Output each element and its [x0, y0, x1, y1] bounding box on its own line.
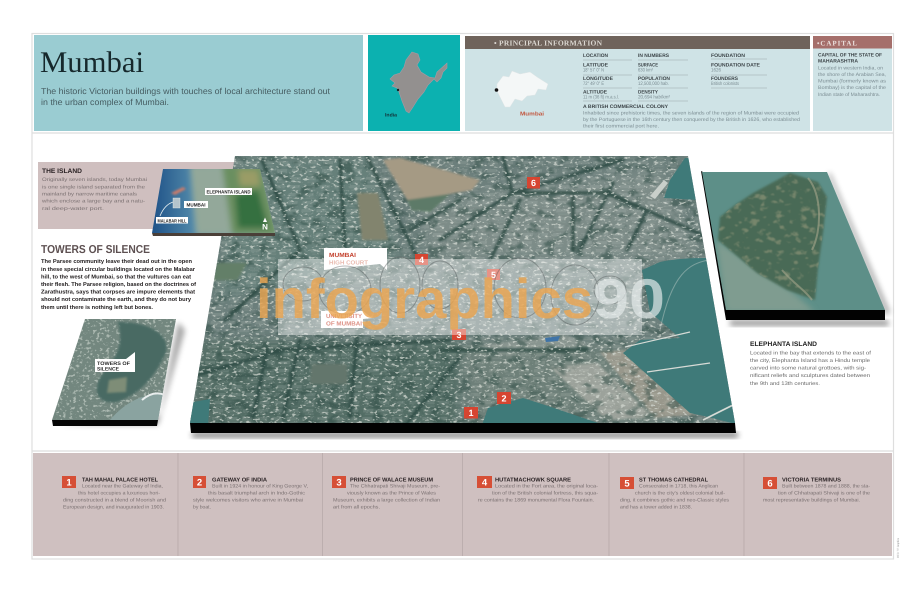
- column: foundation: British colonists: [711, 81, 739, 87]
- column: in numbers: DENSITY: [638, 90, 659, 96]
- marker 5: [487, 269, 500, 280]
- column: foundation: FOUNDATION: [711, 53, 745, 59]
- text block: a British commercial colony: Inhabited since prehistoric times, the seven islands of the region of Mumbai were occupied: [583, 110, 799, 116]
- map: the island inset: [150, 165, 278, 236]
- text block: Elephanta Island: the city, Elephanta Island has a Hindu temple: [750, 358, 870, 364]
- landmark 3: PRINCE OF WALACE MUSEUM: [350, 478, 433, 484]
- heading: towers of silence: TOWERS OF SILENCE: [41, 244, 150, 256]
- landmark 4: 4: [482, 478, 488, 488]
- text block: capital description: [818, 52, 887, 98]
- text block: a British commercial colony: [583, 104, 800, 130]
- landmark 2: by boat.: [193, 504, 211, 510]
- map: Maharashtra: [495, 71, 548, 118]
- column: location: ALTITUDE: [583, 90, 608, 96]
- callout: towers of silence: TOWERS OF: [97, 361, 130, 367]
- map: towers of silence block: [45, 315, 185, 426]
- callout: University of Mumbai: UNIVERSITY: [326, 313, 362, 320]
- landmark 3: [332, 476, 440, 510]
- landmark 1: [62, 476, 166, 510]
- column: location: 18° 57' 0" N: [583, 68, 604, 74]
- landmark 3: Museum, exhibits a large collection of Indian: [333, 498, 440, 504]
- landmark 1: this hotel occupies a luxurious hori-: [78, 490, 160, 496]
- text block: capital description: Indian state of Maharashtra.: [818, 92, 880, 98]
- text block: Elephanta Island: carved into some natural grottoes, with sig-: [750, 366, 866, 372]
- landmark 4: Located in the Fort area, the original loca-: [495, 484, 598, 490]
- landmark 4: tion of the British colonial fortress, this squa-: [492, 490, 598, 496]
- label: Elephanta Island: ELEPHANTA ISLAND: [206, 190, 251, 196]
- column rules: [583, 59, 767, 101]
- text block: Originally seven islands, today Mumbai: [42, 177, 147, 183]
- landmark 6: 6: [767, 478, 773, 490]
- text block: ral deep-water port.: [42, 206, 104, 212]
- watermark: infographics: [256, 267, 593, 330]
- landmark 3: art from all epochs.: [333, 504, 380, 510]
- column: in numbers: IN NUMBERS: [638, 53, 670, 59]
- landmark 1: European design, and inaugurated in 1903.: [63, 504, 164, 510]
- landmark 4: re contains the 1869 monumental Flora Fountain.: [478, 498, 594, 504]
- panel: principal information: [465, 36, 810, 131]
- callout: Mumbai High Court: HIGH COURT: [329, 260, 368, 266]
- watermark: [256, 257, 665, 335]
- text block: towers of silence: hill, to the west of Mumbai, so that the vultures can eat: [41, 274, 191, 280]
- callout: University of Mumbai: OF MUMBAI: [326, 320, 362, 328]
- column: location: LONGITUDE: [583, 76, 614, 82]
- text block: capital description: Mumbai (formerly known as: [818, 78, 887, 84]
- text block: Elephanta Island: Located in the bay that extends to the east of: [750, 350, 872, 356]
- landmark 2: Built in 1924 in honour of King George V,: [212, 484, 308, 490]
- column: in numbers: 12,500,000 hab.: [638, 81, 669, 87]
- landmark 6: VICTORIA TERMINUS: [782, 478, 841, 484]
- text block: capital description: MAHARASHTRA: [818, 58, 858, 64]
- landmark 5: ding, it combines gothic and neo-Classic styles: [620, 498, 730, 504]
- map: Elephanta Island block: [700, 170, 890, 326]
- heading: THE ISLAND: [42, 168, 82, 175]
- callout: University of Mumbai: [321, 311, 372, 328]
- title: Mumbai: [40, 46, 144, 79]
- marker 2: 2: [501, 394, 507, 404]
- sports fields and parks: [213, 158, 480, 384]
- subtitle: The historic Victorian buildings with touches of local architecture stand out: [41, 86, 331, 96]
- text block: towers of silence: them until there is nothing left but bones.: [41, 304, 153, 311]
- marker 5: 5: [491, 270, 496, 280]
- landmark 1: ding constructed in a blend of Moorish and: [63, 498, 166, 504]
- landmark 2: [193, 476, 308, 510]
- landmark 3: viously known as the Prince of Wales: [347, 490, 437, 496]
- text block: a British commercial colony: by the Portuguese in the 16th century then conquered by the British in 1626, who established: [583, 117, 800, 123]
- map: central Mumbai aerial block: [185, 150, 745, 438]
- column: location: 11 m (36 ft) m.a.s.l.: [583, 94, 619, 100]
- text block: mainland by narrow maritime canals: [42, 192, 138, 198]
- column: in numbers: 20,694 hab/km²: [638, 94, 670, 100]
- landmark 1: 1: [66, 478, 72, 488]
- landmark 5: 5: [624, 478, 630, 490]
- text block: a British commercial colony: A BRITISH COMMERCIAL COLONY: [583, 104, 669, 110]
- text block: towers of silence: Zarathustra, says that corpses are impure elements that: [41, 288, 195, 296]
- callout: Mumbai High Court: MUMBAI: [329, 252, 356, 259]
- landmark 4: HUTATMACHOWK SQUARE: [495, 478, 571, 484]
- marker 1: [464, 407, 478, 418]
- landmark 5: church is the city's oldest colonial buil-: [635, 490, 725, 496]
- column: in numbers: SURFACE: [638, 62, 659, 68]
- landmark 3: 3: [336, 478, 342, 488]
- text block: Elephanta Island: the 9th and 13th centuries.: [750, 381, 820, 387]
- panel: the island: [38, 162, 243, 229]
- landmark 2: this basalt triumphal arch in Indo-Gothic: [208, 490, 306, 496]
- text block: Elephanta Island: nificant reliefs and sculptures dated between: [750, 373, 870, 379]
- landmark 5: ST THOMAS CATHEDRAL: [639, 478, 709, 484]
- column: location: [583, 53, 619, 100]
- icon: Mumbai dot: [397, 89, 399, 91]
- landmark 4: [477, 476, 598, 504]
- landmark 2: 2: [197, 478, 202, 488]
- text block: a British commercial colony: their first commercial port here.: [583, 124, 659, 130]
- column: in numbers: [638, 53, 670, 100]
- landmark 1: TAH MAHAL PALACE HOTEL: [82, 478, 159, 484]
- column: location: LATITUDE: [583, 62, 609, 68]
- marker 3: [452, 329, 466, 340]
- landmark 5: [620, 477, 730, 510]
- landmark 6: [763, 477, 870, 504]
- heading bar: •CAPITAL: [817, 40, 857, 48]
- column: foundation: FOUNDATION DATE: [711, 62, 761, 68]
- text block: which enclose a large bay and a natu-: [42, 198, 145, 204]
- column: in numbers: 630 km²: [638, 68, 653, 74]
- column: foundation: [711, 53, 761, 87]
- panel: landmarks list: [33, 453, 892, 556]
- label: Mumbai: MUMBAI: [186, 202, 206, 208]
- text block: Elephanta Island: [750, 341, 872, 387]
- landmark 3: The Chhatrapati Shivaji Museum, pre-: [350, 484, 440, 490]
- marker 6: 6: [531, 178, 536, 188]
- text block: capital description: the shore of the Arabian Sea,: [818, 72, 886, 78]
- marker 1: 1: [468, 408, 474, 418]
- column: location: LOCATION: [583, 53, 608, 59]
- subtitle: in the urban complex of Mumbai.: [41, 97, 169, 107]
- tree-lined avenues: [190, 157, 707, 423]
- heading: ELEPHANTA ISLAND: [750, 341, 817, 348]
- port areas: [480, 335, 695, 420]
- label: Malabar Hill: MALABAR HILL: [158, 218, 187, 224]
- landmark 1: Located near the Gateway of India,: [82, 484, 163, 490]
- text block: towers of silence: [41, 258, 196, 311]
- heading bar: [465, 36, 810, 49]
- label: India: India: [385, 112, 397, 118]
- icon: India outline: [390, 52, 447, 113]
- text block: towers of silence: The Parsee community leave their dead out in the open: [41, 258, 193, 265]
- landmark 5: and has a tower added in 1838.: [620, 504, 692, 510]
- callout: towers of silence: [95, 352, 135, 372]
- watermark: 90: [593, 267, 665, 330]
- callout: Mumbai High Court: [324, 248, 387, 270]
- text block: towers of silence: their flesh. The Parsee religion, based on the doctrines of: [41, 281, 196, 288]
- marker 4: 4: [419, 255, 424, 265]
- marker 6: [527, 177, 540, 188]
- landmark 2: style welcomes visitors who arrive in Mumbai: [193, 498, 303, 504]
- text block: capital description: Bombay) is the capital of the: [818, 85, 886, 91]
- text block: capital description: Located in western India, on: [818, 66, 883, 72]
- landmark 5: Consecrated in 1718, this Anglican: [639, 484, 718, 490]
- column: foundation: 1626: [711, 68, 721, 74]
- text block: capital description: CAPITAL OF THE STATE OF: [818, 52, 882, 58]
- panel: India locator map: [368, 35, 460, 131]
- landmark 6: tion of Chhatrapati Shivaji is one of the: [778, 490, 870, 496]
- panel: capital: [813, 36, 892, 131]
- text block: is one single island separated from the: [42, 184, 145, 190]
- text block: towers of silence: in these special circular buildings located on the Malabar: [41, 266, 196, 273]
- landmark 6: Built between 1878 and 1888, the sta-: [782, 484, 870, 490]
- heading bar: • PRINCIPAL INFORMATION: [494, 38, 603, 48]
- column: foundation: FOUNDERS: [711, 76, 739, 82]
- text block: towers of silence: should not contaminate the earth, and they do not bury: [41, 296, 192, 303]
- map: Maharashtra: Mumbai: [520, 110, 544, 118]
- icon: north arrow: N: [262, 222, 268, 232]
- landmark 2: GATEWAY OF INDIA: [212, 478, 267, 484]
- marker 4: [415, 254, 428, 265]
- credit line: INFO. TIT Graphics: [896, 538, 900, 558]
- marker 3: 3: [456, 330, 462, 340]
- callout: towers of silence: SILENCE: [97, 366, 120, 372]
- marker 2: [497, 392, 511, 404]
- text block: [42, 177, 147, 212]
- header panel: Mumbai title: [34, 35, 363, 131]
- subtitle: [41, 86, 331, 107]
- column: location: 72° 49' 0" E: [583, 81, 605, 87]
- column: in numbers: POPULATION: [638, 76, 670, 82]
- water: [186, 158, 740, 425]
- landmark 6: most representative buildings of Mumbai.: [763, 498, 860, 504]
